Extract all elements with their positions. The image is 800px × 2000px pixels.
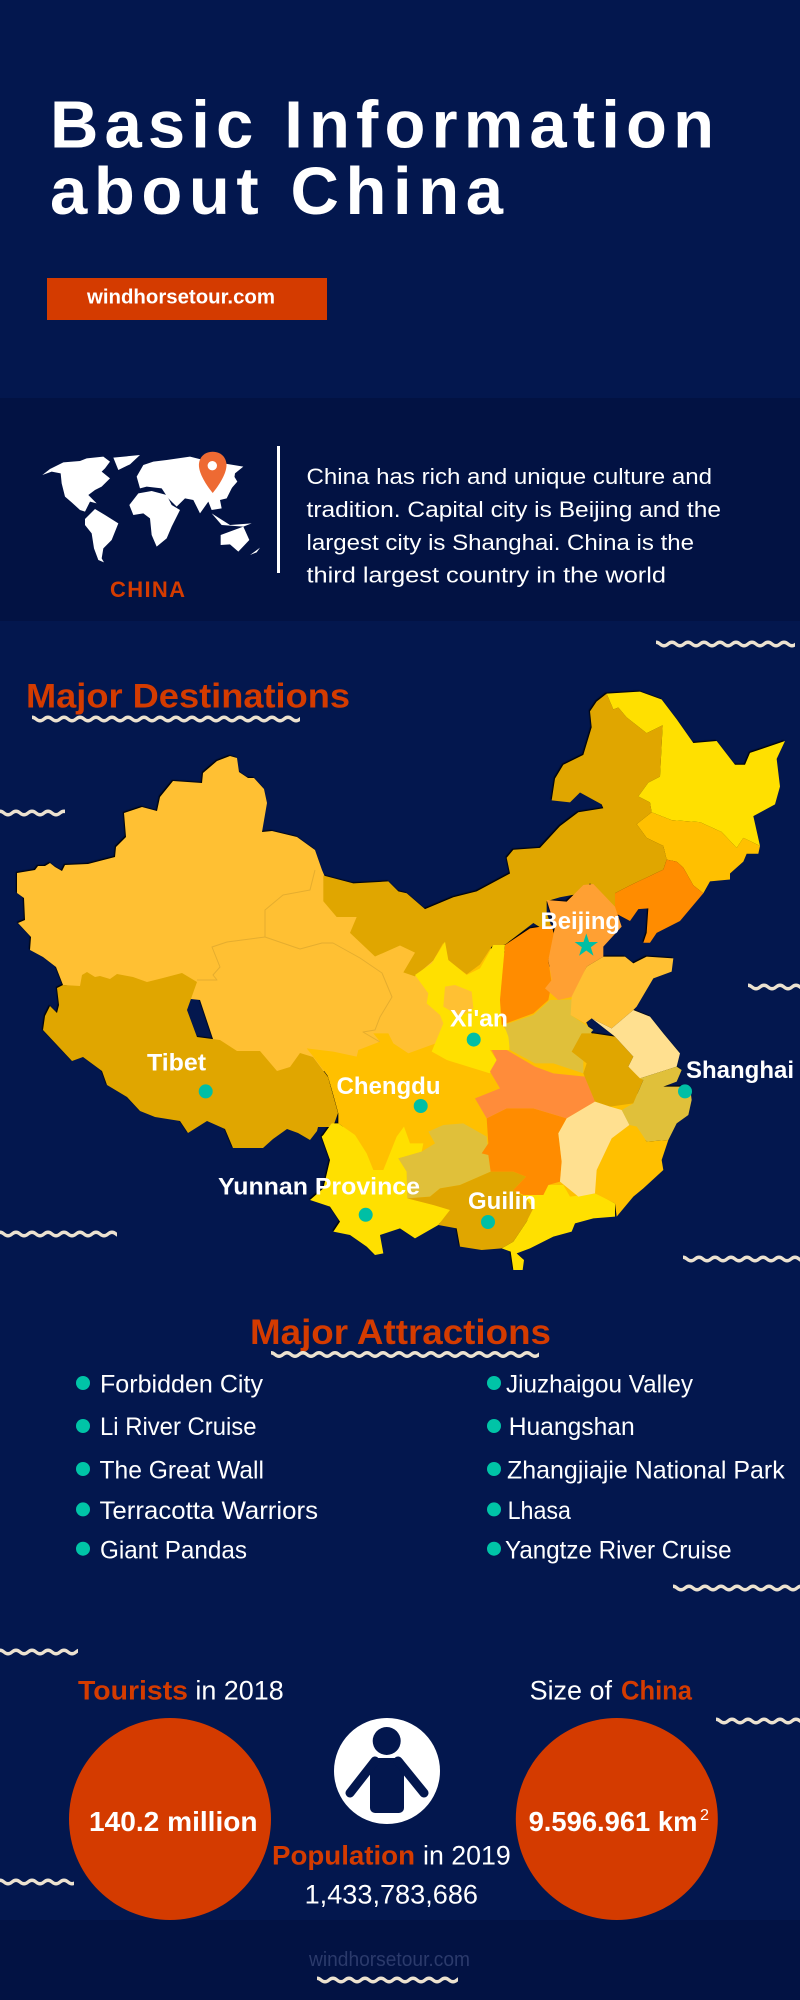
marker: Tibet	[147, 1050, 213, 1098]
marker: Guilin	[468, 1188, 536, 1229]
stat: population: 1,433,783,686	[305, 1880, 478, 1910]
region: Guangxi	[407, 1172, 533, 1250]
region: Ningxia	[443, 985, 473, 1017]
region: Guizhou	[398, 1123, 491, 1198]
region: Heilongjiang	[607, 692, 785, 848]
label: China: CHINA	[110, 577, 185, 602]
region: Hebei	[545, 884, 622, 1000]
region: Shanxi	[500, 925, 555, 1025]
list: attractions right: Jiuzhaigou Valley	[506, 1370, 693, 1398]
marker: Guilin: Guilin	[468, 1188, 536, 1215]
panel: intro	[42, 446, 721, 602]
list: attractions right: Lhasa	[508, 1497, 571, 1525]
list: attractions left: The Great Wall	[100, 1457, 264, 1485]
label: Beijing: Beijing	[540, 908, 620, 935]
region: Zhejiang	[622, 1067, 692, 1142]
region: Jilin	[637, 812, 760, 893]
marker: Beijing star	[575, 934, 598, 956]
website button	[47, 278, 327, 320]
stat: size of China: 2	[700, 1807, 709, 1824]
icon: person	[334, 1718, 440, 1824]
intro text: largest city is Shanghai. China is the	[306, 530, 694, 555]
stat: size of China: 9.596.961 km	[529, 1806, 697, 1837]
marker: Xi'an: Xi'an	[450, 1006, 508, 1032]
marker: Tibet: Tibet	[147, 1050, 206, 1076]
stat: size of China: China	[621, 1676, 693, 1706]
heading: major attractions: Major Attractions	[250, 1313, 551, 1352]
list: attractions left: Li River Cruise	[100, 1413, 256, 1441]
intro text: China has rich and unique culture and	[306, 464, 712, 489]
region: Shaanxi	[415, 942, 509, 1073]
marker: Shanghai	[678, 1057, 794, 1098]
region: Fujian	[595, 1125, 668, 1217]
marker: Yunnan Province: Yunnan Province	[218, 1174, 420, 1200]
title: about China	[50, 154, 504, 229]
region: Xinjiang, Qinghai and Gansu	[17, 756, 445, 1080]
icon: world map with pin	[42, 452, 260, 562]
region: Shandong	[571, 957, 673, 1028]
intro text: tradition. Capital city is Beijing and the	[306, 497, 721, 522]
marker: Yunnan Province	[218, 1174, 420, 1222]
intro text: third largest country in the world	[306, 562, 666, 588]
stat: size of China: Size of	[530, 1676, 612, 1706]
stat: population: in 2019	[423, 1841, 511, 1871]
list: attractions left: Giant Pandas	[100, 1536, 247, 1564]
stat: population	[272, 1718, 511, 1910]
heading: major destinations: Major Destinations	[26, 678, 350, 716]
marker: Chengdu: Chengdu	[336, 1073, 440, 1100]
region: Tibet	[43, 972, 338, 1148]
marker: Chengdu	[336, 1073, 440, 1113]
list: attractions right: Huangshan	[509, 1413, 635, 1441]
stat: tourists: in 2018	[195, 1676, 284, 1706]
region: Guangdong and Hainan	[502, 1185, 615, 1270]
region: Henan	[504, 999, 593, 1073]
list: attractions left: Terracotta Warriors	[100, 1497, 318, 1525]
stat: population: Population	[272, 1841, 415, 1871]
list: attractions right: Zhangjiajie National Park	[507, 1457, 785, 1485]
stat: tourists: Tourists	[78, 1676, 188, 1706]
region: Jiangxi	[558, 1102, 629, 1197]
map of China	[17, 692, 794, 1270]
list: attractions left	[76, 1370, 318, 1564]
region: Jiangsu	[592, 1010, 680, 1078]
marker: Shanghai: Shanghai	[686, 1057, 794, 1084]
list: attractions right: Yangtze River Cruise	[505, 1536, 732, 1564]
footer: windhorsetour.com	[308, 1949, 470, 1971]
underlay: map interior	[320, 880, 660, 1230]
list: attractions left: Forbidden City	[100, 1370, 263, 1398]
region: Hunan	[482, 1108, 567, 1195]
website button: windhorsetour.com	[86, 286, 275, 308]
list: attractions right	[487, 1370, 785, 1564]
intro text	[306, 464, 721, 588]
region: Sichuan	[307, 1033, 500, 1170]
stat: tourists: 140.2 million	[89, 1806, 258, 1837]
region: Liaoning	[615, 860, 703, 943]
region: Inner Mongolia	[323, 694, 667, 976]
region: Yunnan	[310, 1123, 450, 1255]
region: Anhui	[572, 1033, 643, 1107]
decorative squiggles	[0, 639, 800, 1985]
stat: tourists	[69, 1676, 284, 1920]
title	[50, 88, 714, 229]
stat: size of China	[516, 1676, 718, 1920]
region: Hubei	[475, 1050, 595, 1118]
title: Basic Information	[50, 88, 714, 162]
provincial borders	[197, 870, 392, 1042]
marker: Xi'an	[450, 1006, 508, 1047]
